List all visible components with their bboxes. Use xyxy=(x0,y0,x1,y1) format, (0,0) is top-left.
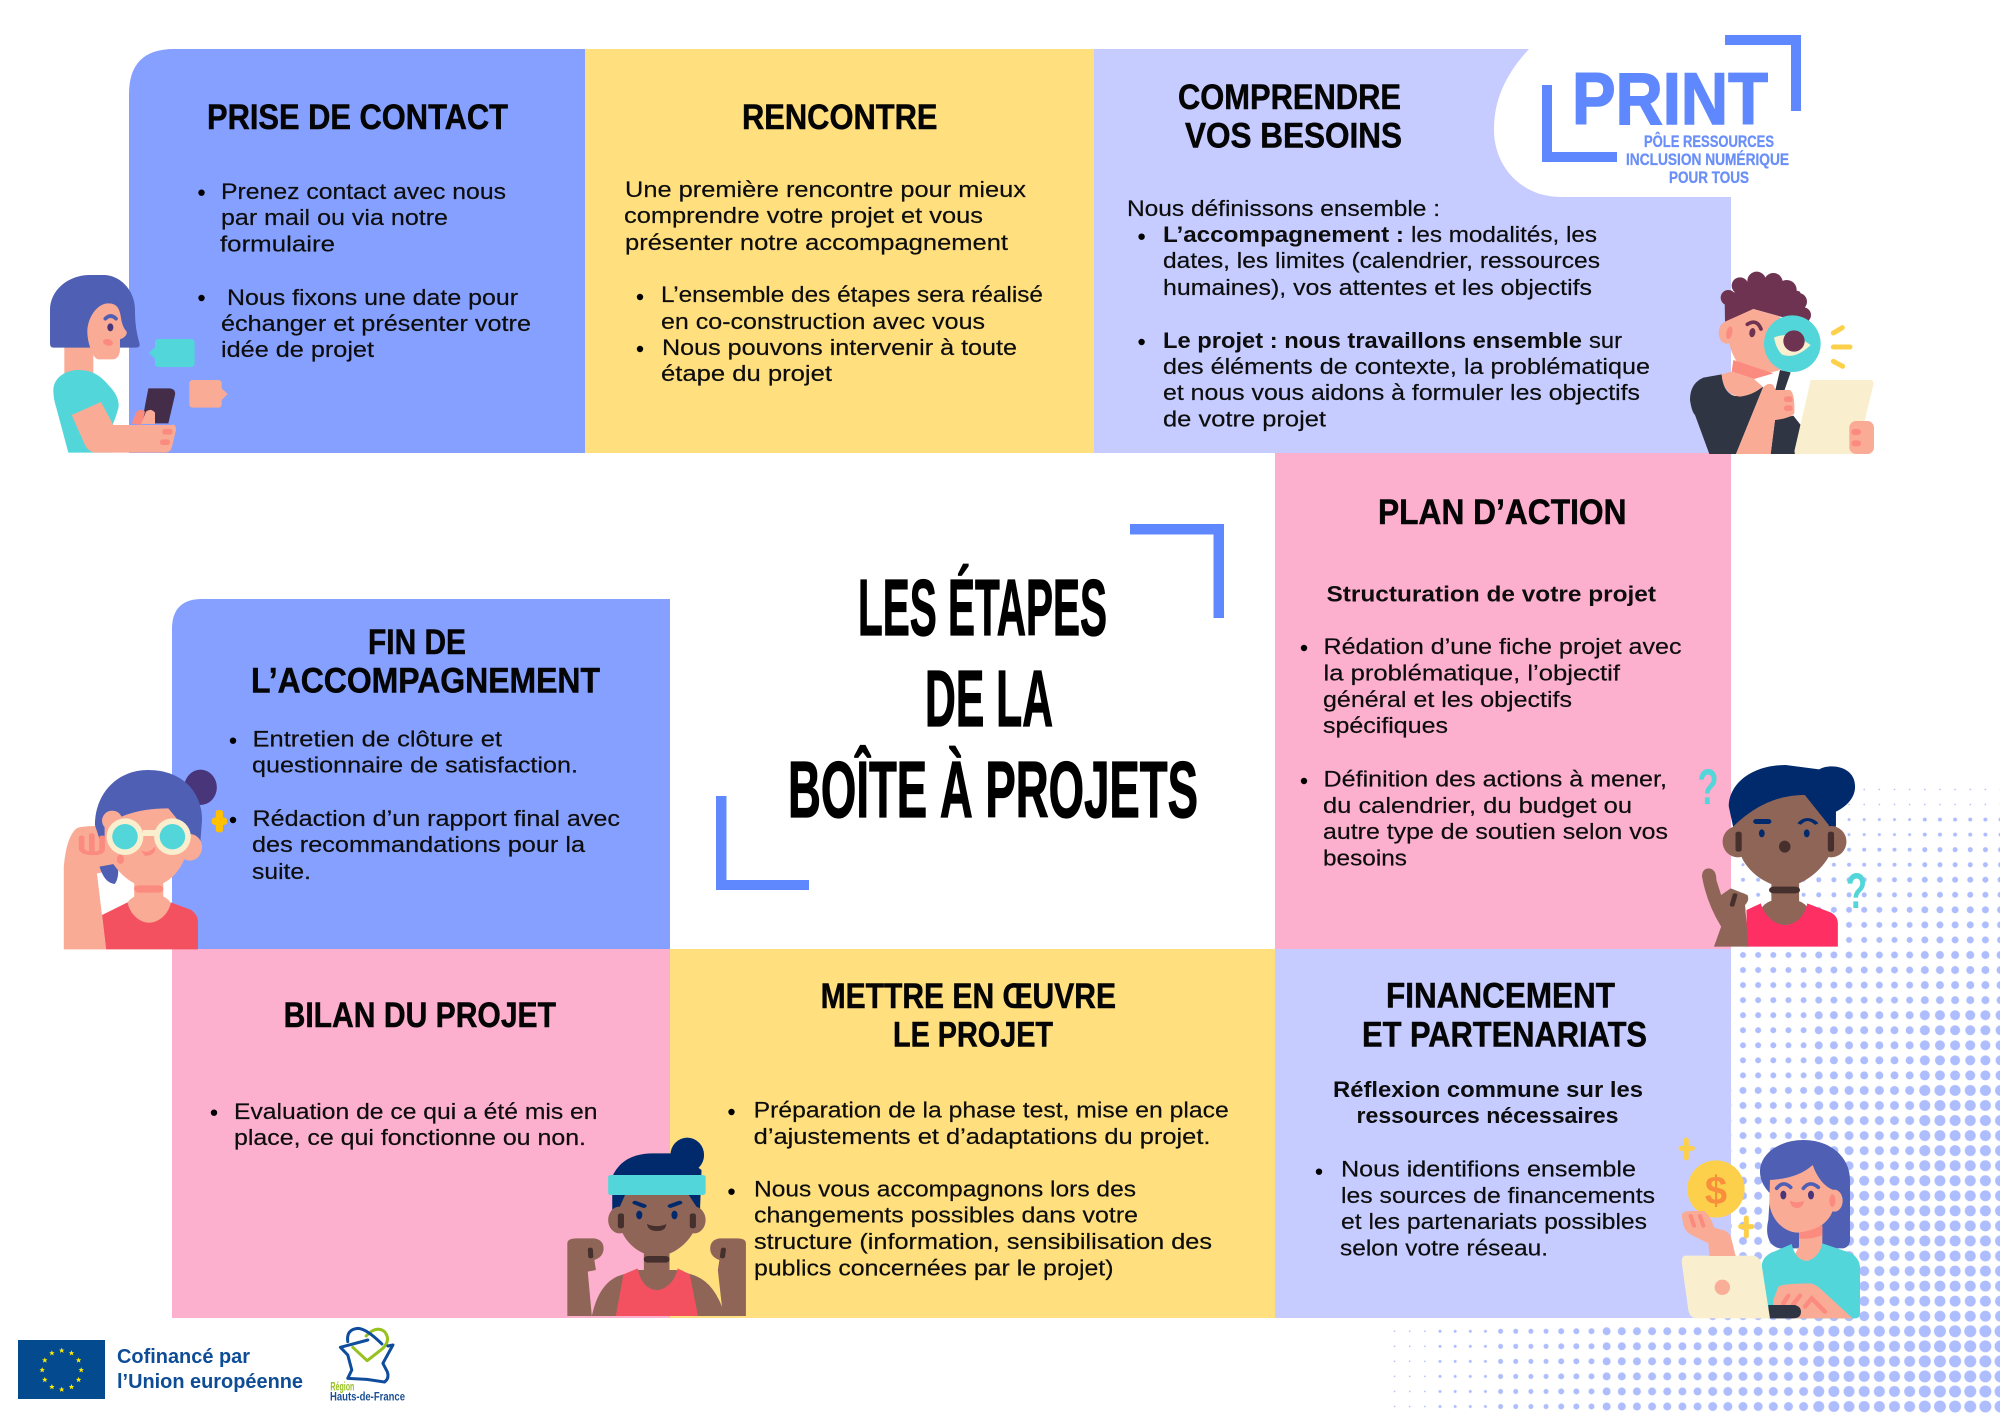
text: besoins list: Nous définissons ensemble : xyxy=(1127,196,1440,221)
text: rencontre description: en co-construction avec vous xyxy=(661,309,985,334)
heading: plan d'action: PLAN D’ACTION xyxy=(1378,493,1626,532)
panel: bilan du projet xyxy=(172,949,670,1318)
text: plan d'action list: Définition des actions à mener, xyxy=(1324,767,1667,792)
text: contact steps: Prenez contact avec nous xyxy=(221,179,506,204)
text: mise en oeuvre list: structure (information, sensibilisation des xyxy=(754,1229,1212,1254)
text: rencontre description: L’ensemble des étapes sera réalisé xyxy=(661,282,1043,307)
text: besoins list: et nous vous aidons à formuler les objectifs xyxy=(1163,380,1640,405)
text: plan d'action list: la problématique, l’objectif xyxy=(1324,661,1621,686)
text: financement list: et les partenariats possibles xyxy=(1341,1209,1647,1234)
text: plan d'action list xyxy=(1301,634,1682,871)
panel: financement et partenariats xyxy=(1275,949,1731,1318)
logo: Région Hauts-de-France xyxy=(330,1328,405,1404)
text: mise en oeuvre list: changements possibles dans votre xyxy=(754,1203,1138,1228)
text: besoins list: de votre projet xyxy=(1163,407,1326,432)
text: fin list: Entretien de clôture et xyxy=(252,727,502,752)
text: contact steps: formulaire xyxy=(220,232,335,257)
text: rencontre description: comprendre votre projet et vous xyxy=(624,203,983,228)
text: rencontre description: Nous pouvons intervenir à toute xyxy=(662,335,1017,360)
text: besoins list: sur xyxy=(1589,328,1622,353)
title bracket: top right xyxy=(1130,524,1224,618)
logo: PRINT: POUR TOUS xyxy=(1669,168,1749,187)
text: plan d'action list: du calendrier, du budget ou xyxy=(1323,793,1632,818)
subheading: structuration: Structuration de votre projet xyxy=(1326,582,1657,607)
text: fin list: suite. xyxy=(252,859,311,884)
text: bilan list: Evaluation de ce qui a été mis en xyxy=(234,1099,598,1124)
text: financement list: les sources de financements xyxy=(1341,1183,1655,1208)
heading: rencontre: RENCONTRE xyxy=(742,98,938,137)
icon: woman with phone xyxy=(50,275,228,453)
icon: question mark right: ? xyxy=(1846,863,1867,919)
text: rencontre description: étape du projet xyxy=(661,361,832,386)
text: contact steps: par mail ou via notre xyxy=(221,205,448,230)
logo: PRINT: INCLUSION NUMÉRIQUE xyxy=(1626,150,1789,169)
text: mise en oeuvre list: publics concernées par le projet) xyxy=(754,1256,1114,1281)
text: besoins list: des éléments de contexte, la problématique xyxy=(1163,354,1650,379)
text: cofinancement xyxy=(117,1346,303,1393)
text: plan d'action list: spécifiques xyxy=(1323,713,1448,738)
logo: PRINT: PÔLE RESSOURCES xyxy=(1644,132,1774,151)
text: financement list xyxy=(1316,1157,1655,1261)
heading: financement et partenariats: FINANCEMENT xyxy=(1386,977,1615,1016)
text: fin list: des recommandations pour la xyxy=(252,832,586,857)
text: besoins list: humaines), vos attentes et les objectifs xyxy=(1163,275,1592,300)
text: besoins list xyxy=(1127,196,1650,432)
text: besoins list: L’accompagnement : xyxy=(1163,222,1404,247)
subheading: reflexion commune: ressources nécessaires xyxy=(1356,1103,1618,1128)
text: contact steps: idée de projet xyxy=(221,337,374,362)
text: besoins list: dates, les limites (calendrier, ressources xyxy=(1163,248,1600,273)
text: contact steps: échanger et présenter votre xyxy=(221,311,531,336)
title: LES ÉTAPES xyxy=(858,563,1107,652)
logo: PRINT: PRINT xyxy=(1572,59,1768,140)
text: mise en oeuvre list xyxy=(728,1098,1229,1281)
text: rencontre description xyxy=(624,177,1043,386)
icon: question mark left: ? xyxy=(1698,759,1718,815)
text: cofinancement: Cofinancé par xyxy=(117,1346,250,1368)
heading: bilan du projet: BILAN DU PROJET xyxy=(284,996,556,1035)
text: bilan list xyxy=(211,1099,598,1150)
icon: woman with coin and laptop xyxy=(1681,1140,1860,1318)
text: besoins list: Le projet : nous travaillons ensemble xyxy=(1163,328,1582,353)
heading: comprendre vos besoins: VOS BESOINS xyxy=(1185,117,1402,156)
panel: comprendre vos besoins xyxy=(1094,49,1731,453)
heading: financement et partenariats xyxy=(1362,977,1647,1055)
text: rencontre description: présenter notre accompagnement xyxy=(625,230,1008,255)
heading: fin de l'accompagnement xyxy=(251,623,600,701)
logo: Région Hauts-de-France: Hauts-de-France xyxy=(330,1390,405,1404)
logo: Région Hauts-de-France: Région xyxy=(330,1382,354,1394)
panel: fin de l'accompagnement xyxy=(172,599,670,949)
icon: man with headband xyxy=(567,1138,746,1316)
subheading: reflexion commune xyxy=(1333,1077,1643,1128)
text: financement list: selon votre réseau. xyxy=(1340,1236,1548,1261)
heading: comprendre vos besoins: COMPRENDRE xyxy=(1178,78,1401,117)
text: cofinancement: l’Union européenne xyxy=(117,1371,303,1393)
heading: mettre en oeuvre le projet: LE PROJET xyxy=(893,1016,1053,1055)
text: besoins list: les modalités, les xyxy=(1411,222,1597,247)
text: bilan list: place, ce qui fonctionne ou non. xyxy=(234,1125,586,1150)
text: rencontre description: Une première rencontre pour mieux xyxy=(625,177,1026,202)
text: plan d'action list: Rédation d’une fiche projet avec xyxy=(1324,634,1682,659)
title bracket: bottom left xyxy=(716,796,809,890)
logo: European Union flag xyxy=(18,1340,105,1399)
heading: mettre en oeuvre le projet xyxy=(821,977,1116,1055)
text: fin list xyxy=(230,727,620,884)
panel: prise de contact xyxy=(129,49,585,453)
icon: woman with coin and laptop: $ xyxy=(1705,1169,1727,1213)
heading: fin de l'accompagnement: L’ACCOMPAGNEMENT xyxy=(251,662,600,701)
heading: mettre en oeuvre le projet: METTRE EN ŒUVRE xyxy=(821,977,1116,1016)
heading: financement et partenariats: ET PARTENARIATS xyxy=(1362,1016,1647,1055)
text: plan d'action list: général et les objectifs xyxy=(1323,687,1572,712)
text: plan d'action list: besoins xyxy=(1323,846,1407,871)
title xyxy=(788,563,1198,834)
text: mise en oeuvre list: Nous vous accompagnons lors des xyxy=(754,1177,1136,1202)
text: contact steps xyxy=(198,179,531,362)
heading: comprendre vos besoins xyxy=(1178,78,1402,156)
text: fin list: Rédaction d’un rapport final avec xyxy=(252,806,620,831)
panel: plan d'action xyxy=(1275,453,1731,949)
heading: fin de l'accompagnement: FIN DE xyxy=(368,623,466,662)
halftone dot background xyxy=(1387,782,2000,1414)
text: fin list: questionnaire de satisfaction. xyxy=(252,753,578,778)
text: mise en oeuvre list: Préparation de la phase test, mise en place xyxy=(754,1098,1229,1123)
title: DE LA xyxy=(925,654,1053,743)
panel: mettre en oeuvre le projet xyxy=(670,949,1275,1318)
text: contact steps: Nous fixons une date pour xyxy=(227,285,518,310)
logo: PRINT xyxy=(1542,35,1801,187)
text: plan d'action list: autre type de soutien selon vos xyxy=(1323,819,1668,844)
icon: man with magnifying glass xyxy=(1690,272,1874,454)
panel: rencontre xyxy=(585,49,1094,453)
heading: prise de contact: PRISE DE CONTACT xyxy=(207,98,508,137)
icon: woman thinking xyxy=(1702,765,1855,947)
icon: woman with binoculars xyxy=(64,770,227,949)
title: BOÎTE À PROJETS xyxy=(788,745,1198,834)
subheading: reflexion commune: Réflexion commune sur les xyxy=(1333,1077,1643,1102)
text: financement list: Nous identifions ensemble xyxy=(1341,1157,1636,1182)
text: mise en oeuvre list: d’ajustements et d’adaptations du projet. xyxy=(754,1124,1210,1149)
